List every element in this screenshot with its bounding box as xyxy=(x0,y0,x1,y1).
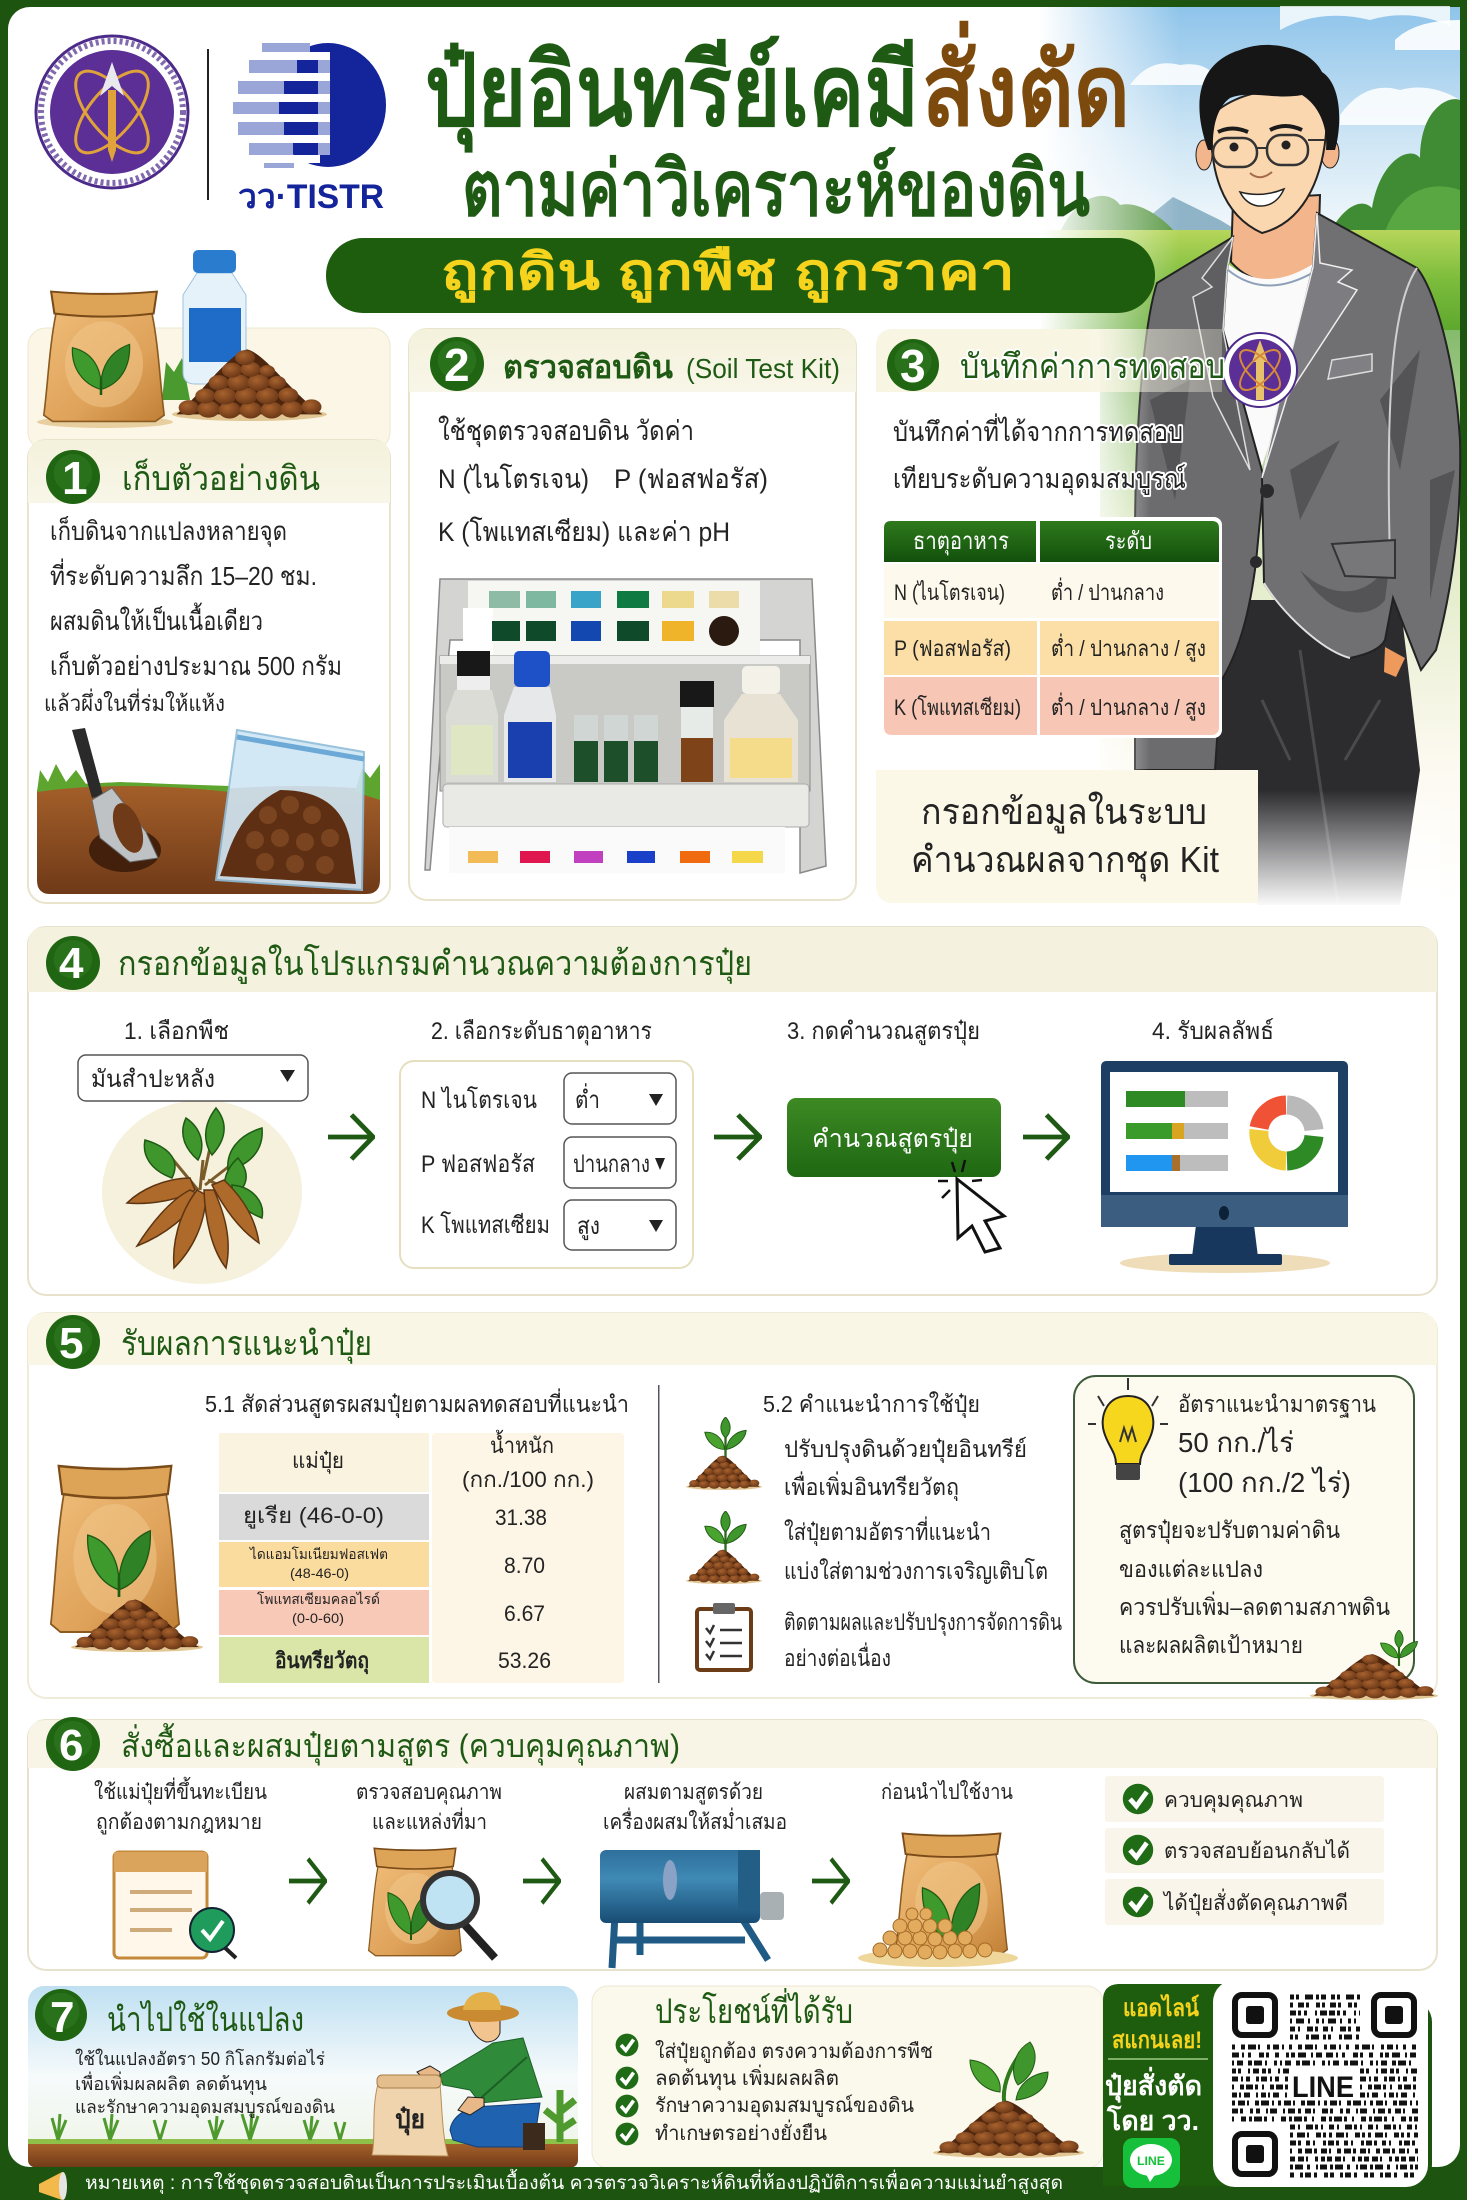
number badge 2: 2 xyxy=(444,339,470,391)
callout: standard rate: 50 กก./ไร่ xyxy=(1178,1427,1294,1458)
icon: result monitor xyxy=(1101,1061,1348,1273)
panel: LINE call to action: สแกนเลย! xyxy=(1112,2027,1202,2054)
button: calculate: คำนวณสูตรปุ๋ย xyxy=(812,1125,973,1154)
neck xyxy=(1231,195,1320,281)
table: formula: ไดแอมโมเนียมฟอสเฟต xyxy=(249,1546,388,1562)
lapels xyxy=(1193,237,1250,470)
sub-headings: 1. เลือกพืช xyxy=(124,1018,229,1045)
face xyxy=(467,2015,500,2042)
nose and mouth xyxy=(1250,172,1272,177)
logo: NSTDA-style purple seal xyxy=(36,36,188,188)
button: calculate xyxy=(787,1098,1001,1177)
panel: top bag xyxy=(28,250,390,450)
number badge 7 xyxy=(35,1989,87,2042)
step captions xyxy=(94,1777,1013,1835)
body text: เทียบระดับความอุดมสมบูรณ์ xyxy=(893,463,1186,496)
panel: nutrient selects: ต่ำ xyxy=(575,1083,600,1114)
quality checks: ควบคุมคุณภาพ xyxy=(1164,1789,1303,1813)
finder patterns xyxy=(1235,1995,1414,2174)
panel: nutrient selects: N ไนโตรเจน xyxy=(421,1086,537,1114)
icon: LINE: LINE xyxy=(1137,2154,1165,2168)
step captions: และแหล่งที่มา xyxy=(372,1807,487,1834)
table: nutrient levels: ธาตุอาหาร xyxy=(913,528,1009,556)
brows xyxy=(1218,126,1302,132)
table: formula xyxy=(219,1430,624,1683)
illustration: farmer with sack: ปุ๋ย xyxy=(395,2104,425,2136)
sub-heading 5.1: 5.1 สัดส่วนสูตรผสมปุ๋ยตามผลทดสอบที่แนะนำ xyxy=(205,1388,629,1418)
callout: enter data: คำนวณผลจากชุด Kit xyxy=(911,839,1219,882)
heading: (Soil Test Kit) xyxy=(686,353,840,384)
body text: P (ฟอสฟอรัส) xyxy=(614,464,768,494)
panel: nutrient selects xyxy=(400,1061,693,1268)
number badge 1 xyxy=(46,450,100,504)
jeans xyxy=(450,2103,540,2147)
advice text: เพื่อเพิ่มอินทรียวัตถุ xyxy=(784,1471,959,1501)
benefits list: ใส่ปุ๋ยถูกต้อง ตรงความต้องการพืช xyxy=(655,2040,933,2064)
arrow xyxy=(289,1859,325,1903)
table: formula: น้ำหนัก xyxy=(490,1430,554,1458)
callout: standard rate xyxy=(1074,1376,1414,1683)
logo: TISTR: วว·TISTR xyxy=(238,178,384,216)
jacket right front xyxy=(1262,213,1460,670)
table: nutrient levels xyxy=(881,517,1222,738)
mountain xyxy=(1130,197,1240,232)
icon: fertilizer bag xyxy=(51,1466,203,1652)
slogan pill xyxy=(326,238,1155,313)
panel: LINE call to action xyxy=(1103,1984,1225,2188)
heading: สั่งซื้อและผสมปุ๋ยตามสูตร (ควบคุมคุณภาพ) xyxy=(121,1723,680,1766)
advice text: ปรับปรุงดินด้วยปุ๋ยอินทรีย์ xyxy=(784,1436,1027,1463)
icon: cassava plant xyxy=(102,1100,302,1284)
shirt xyxy=(1223,262,1316,472)
advice text: ติดตามผลและปรับปรุงการจัดการดิน xyxy=(784,1609,1062,1636)
shirt xyxy=(440,2038,542,2103)
table: formula: 31.38 xyxy=(495,1505,547,1530)
logo: TISTR xyxy=(233,43,386,216)
callout: enter data xyxy=(876,770,1258,903)
benefits list xyxy=(616,2034,933,2145)
quality checks: ตรวจสอบย้อนกลับได้ xyxy=(1164,1839,1350,1863)
panel: benefits xyxy=(592,1986,1103,2168)
icon: document with check xyxy=(114,1852,236,1958)
glasses xyxy=(1213,138,1257,167)
panel: LINE call to action: แอดไลน์ xyxy=(1123,1993,1200,2022)
arrow xyxy=(1023,1115,1068,1159)
benefits list: ทำเกษตรอย่างยั่งยืน xyxy=(655,2119,827,2145)
table: formula: 53.26 xyxy=(498,1648,551,1673)
body text: ใช้ในแปลงอัตรา 50 กิโลกรัมต่อไร่ xyxy=(75,2048,325,2069)
sub-headings xyxy=(124,1017,1274,1046)
number badge 2 xyxy=(430,337,484,391)
heading: ตรวจสอบดิน xyxy=(503,349,673,385)
panel: step 3 xyxy=(876,329,1258,903)
divider xyxy=(658,1385,660,1683)
shirt logo xyxy=(1223,333,1297,407)
number badge 6: 6 xyxy=(59,1721,83,1770)
icon: sprout 1 xyxy=(686,1417,762,1490)
panel: step 1 xyxy=(28,440,390,903)
heading: ประโยชน์ที่ได้รับ xyxy=(655,1988,853,2031)
body text: เก็บตัวอย่างประมาณ 500 กรัม xyxy=(50,650,342,681)
table: formula: (48-46-0) xyxy=(290,1565,349,1581)
illustration: soil test kit xyxy=(425,579,826,873)
number badge 4: 4 xyxy=(59,939,84,988)
icon: sprout 2 xyxy=(686,1511,762,1584)
body text: K (โพแทสเซียม) และค่า pH xyxy=(438,517,730,547)
panel: step 4 xyxy=(28,927,1437,1295)
plant xyxy=(545,2090,575,2142)
panel: nutrient selects: P ฟอสฟอรัส xyxy=(421,1151,535,1178)
icon: finished bag and grains xyxy=(858,1833,1018,1967)
table: nutrient levels: P (ฟอสฟอรัส) xyxy=(894,636,1011,661)
eyes xyxy=(1230,142,1238,152)
jacket left front xyxy=(1135,237,1264,770)
panel: step 6 xyxy=(28,1717,1437,1970)
panel: nutrient selects: K โพแทสเซียม xyxy=(421,1211,550,1239)
table: formula: 8.70 xyxy=(504,1553,545,1578)
trousers xyxy=(1170,600,1420,905)
step captions: ก่อนนำไปใช้งาน xyxy=(881,1780,1013,1804)
callout: standard rate: (100 กก./2 ไร่) xyxy=(1178,1467,1351,1498)
icon: cursor xyxy=(938,1160,1004,1252)
table: nutrient levels: ต่ำ / ปานกลาง / สูง xyxy=(1051,633,1206,662)
icon: soil with sprout xyxy=(1310,1630,1438,1700)
callout: standard rate: อัตราแนะนำมาตรฐาน xyxy=(1178,1391,1376,1418)
body text xyxy=(44,515,342,716)
face xyxy=(1211,90,1327,233)
divider line between logos xyxy=(207,49,209,200)
number badge 5 xyxy=(46,1315,100,1369)
jacket shading xyxy=(1150,350,1455,612)
table: formula: โพแทสเซียมคลอไรด์ xyxy=(257,1591,380,1607)
sub-headings: 2. เลือกระดับธาตุอาหาร xyxy=(431,1018,652,1046)
body text: ที่ระดับความลึก 15–20 ชม. xyxy=(50,558,317,591)
table: formula: (0-0-60) xyxy=(292,1610,344,1626)
seedlings xyxy=(52,2112,345,2140)
step captions: ผสมตามสูตรด้วย xyxy=(624,1781,763,1805)
bottom note bar xyxy=(0,2167,1467,2200)
arrow xyxy=(812,1859,848,1903)
body text: แล้วผึ่งในที่ร่มให้แห้ง xyxy=(44,688,225,716)
body text: ผสมดินให้เป็นเนื้อเดียว xyxy=(50,602,263,636)
body text xyxy=(75,2048,335,2118)
QR code card xyxy=(1213,1980,1432,2187)
heading: รับผลการแนะนำปุ๋ย xyxy=(121,1325,372,1364)
icon: bag xyxy=(37,292,173,428)
body text: ใช้ชุดตรวจสอบดิน วัดค่า xyxy=(438,415,694,448)
quality checks: ได้ปุ๋ยสั่งตัดคุณภาพดี xyxy=(1162,1888,1348,1916)
sub-headings: 4. รับผลลัพธ์ xyxy=(1152,1017,1274,1045)
advice text: อย่างต่อเนื่อง xyxy=(784,1642,891,1671)
table: formula: อินทรียวัตถุ xyxy=(275,1648,369,1675)
panel: LINE call to action: โดย วว. xyxy=(1106,2104,1199,2136)
title xyxy=(425,20,1130,232)
panel: step 2 xyxy=(409,329,856,900)
body text: N (ไนโตรเจน) xyxy=(438,464,589,494)
number badge 7: 7 xyxy=(50,1993,74,2042)
panel: step 5 xyxy=(28,1313,1438,1700)
number badge 5: 5 xyxy=(59,1319,83,1368)
callout: standard rate: ควรปรับเพิ่ม–ลดตามสภาพดิน xyxy=(1119,1591,1390,1620)
table: nutrient levels: K (โพแทสเซียม) xyxy=(894,695,1021,720)
note text: หมายเหตุ : การใช้ชุดตรวจสอบดินเป็นการประเมินเบื้องต้น ควรตรวจวิเคราะห์ดินที่ห้องปฏิบัติการเพื่อความแม่นยำสูงสุด xyxy=(85,2169,1063,2195)
title: ปุ๋ยอินทรีย์เคมี xyxy=(425,35,919,153)
table: nutrient levels: ต่ำ / ปานกลาง xyxy=(1051,577,1164,605)
table: formula: แม่ปุ๋ย xyxy=(292,1448,344,1474)
icon: bag with magnifier xyxy=(369,1848,495,1958)
sub-heading 5.2: 5.2 คำแนะนำการใช้ปุ๋ย xyxy=(763,1391,980,1418)
body text: และรักษาความอุดมสมบูรณ์ของดิน xyxy=(75,2097,335,2118)
step captions: เครื่องผสมให้สม่ำเสมอ xyxy=(603,1807,787,1834)
panel: LINE call to action: ปุ๋ยสั่งตัด xyxy=(1105,2066,1202,2103)
table: formula: 6.67 xyxy=(504,1601,545,1626)
callout: enter data: กรอกข้อมูลในระบบ xyxy=(921,791,1207,834)
callout: standard rate: และผลผลิตเป้าหมาย xyxy=(1119,1632,1303,1658)
plastic bag xyxy=(216,730,364,890)
dropdown: crop xyxy=(78,1055,308,1101)
number badge 6 xyxy=(46,1717,100,1771)
icon: light bulb xyxy=(1088,1378,1168,1480)
table: formula: ยูเรีย (46-0-0) xyxy=(243,1503,384,1529)
hands xyxy=(417,2066,440,2082)
hair xyxy=(1199,45,1339,150)
benefits list: รักษาความอุดมสมบูรณ์ของดิน xyxy=(655,2094,914,2118)
icon: megaphone xyxy=(39,2172,67,2200)
body text xyxy=(438,415,768,547)
icon: bottle xyxy=(183,250,246,384)
hat xyxy=(447,2004,519,2022)
number badge 4 xyxy=(46,936,100,990)
LINE label: LINE xyxy=(1292,2071,1354,2104)
illustration: farmer with sack xyxy=(372,1992,575,2156)
body text xyxy=(893,413,1186,496)
dropdown: crop: มันสำปะหลัง xyxy=(91,1066,215,1093)
panel: nutrient selects: ปานกลาง xyxy=(573,1151,650,1178)
icon: seedling in soil xyxy=(933,2042,1084,2158)
advice text: แบ่งใส่ตามช่วงการเจริญเติบโต xyxy=(784,1558,1048,1584)
step captions: ใช้แม่ปุ๋ยที่ขึ้นทะเบียน xyxy=(94,1777,267,1805)
panel: step 7 xyxy=(28,1986,578,2168)
landscape background xyxy=(1040,6,1460,905)
number badge 3 xyxy=(887,339,939,392)
body text: เก็บดินจากแปลงหลายจุด xyxy=(50,515,287,547)
heading xyxy=(503,349,840,385)
sack xyxy=(372,2084,448,2156)
title: สั่งตัด xyxy=(922,20,1130,147)
soil band xyxy=(28,2144,578,2168)
grass tuft xyxy=(162,358,190,400)
table: nutrient levels: ต่ำ / ปานกลาง / สูง xyxy=(1051,692,1206,721)
callout: standard rate: ของแต่ละแปลง xyxy=(1119,1556,1263,1582)
table: formula: (กก./100 กก.) xyxy=(462,1467,594,1492)
trowel xyxy=(72,728,103,798)
benefits list: ลดต้นทุน เพิ่มผลผลิต xyxy=(655,2064,839,2091)
step captions: ตรวจสอบคุณภาพ xyxy=(356,1781,502,1805)
fade trousers xyxy=(1170,790,1440,908)
panel: nutrient selects: สูง xyxy=(577,1213,600,1241)
icon: mixer machine xyxy=(600,1850,784,1968)
arrow xyxy=(328,1115,373,1159)
table: nutrient levels: ระดับ xyxy=(1105,528,1152,555)
arrow xyxy=(523,1859,559,1903)
sub-headings: 3. กดคำนวณสูตรปุ๋ย xyxy=(787,1018,980,1046)
quality checks xyxy=(1105,1776,1384,1925)
icon: LINE xyxy=(1123,2138,1180,2188)
step captions: ถูกต้องตามกฎหมาย xyxy=(96,1811,262,1835)
bottles xyxy=(446,651,798,782)
icon: clipboard xyxy=(697,1603,751,1670)
number badge 1: 1 xyxy=(62,452,88,504)
heading: บันทึกค่าการทดสอบ xyxy=(960,348,1225,386)
advice text: ใส่ปุ๋ยตามอัตราที่แนะนำ xyxy=(784,1516,991,1546)
body text: เพื่อเพิ่มผลผลิต ลดต้นทุน xyxy=(75,2071,267,2095)
callout: standard rate: สูตรปุ๋ยจะปรับตามค่าดิน xyxy=(1119,1517,1340,1544)
heading: เก็บตัวอย่างดิน xyxy=(122,458,320,498)
body text: บันทึกค่าที่ได้จากการทดสอบ xyxy=(893,413,1183,447)
advice text xyxy=(784,1436,1062,1671)
presenter illustration xyxy=(1135,45,1460,908)
heading: นำไปใช้ในแปลง xyxy=(107,2000,304,2039)
heading: กรอกข้อมูลในโปรแกรมคำนวณความต้องการปุ๋ย xyxy=(118,944,752,984)
title: ตามค่าวิเคราะห์ของดิน xyxy=(462,147,1090,232)
arrow xyxy=(714,1115,760,1159)
slogan pill: ถูกดิน ถูกพืช ถูกราคา xyxy=(441,244,1015,303)
number badge 3: 3 xyxy=(900,340,926,392)
illustration: digging soil xyxy=(37,728,380,894)
ears xyxy=(1321,138,1339,168)
icon: soil pile xyxy=(172,349,327,421)
table: nutrient levels: N (ไนโตรเจน) xyxy=(894,580,1005,605)
QR modules xyxy=(1232,1997,1418,2175)
